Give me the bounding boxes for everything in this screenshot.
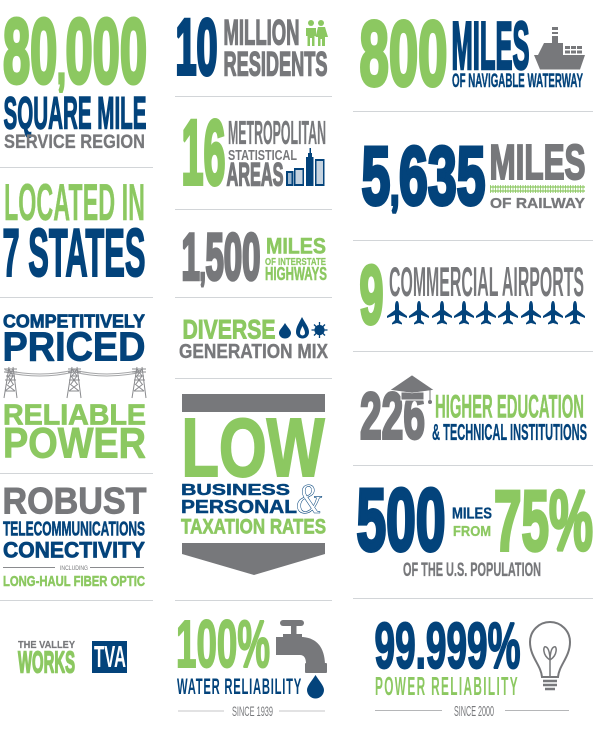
label: from: FROM <box>453 524 491 540</box>
icon: water drop large <box>296 317 309 338</box>
heading: power: POWER <box>3 420 146 468</box>
label: million: MILLION <box>224 14 300 52</box>
panel: 10 million residents: 10 <box>176 3 218 91</box>
panel: 226 higher education and technical institutions <box>360 375 587 452</box>
panel: 16 metropolitan statistical areas: 16 <box>182 102 226 204</box>
logo: the valley works <box>18 640 75 680</box>
label: miles: MILES <box>452 506 492 522</box>
heading: competitively: COMPETITIVELY <box>3 311 146 332</box>
panel: robust telecommunications connectivity <box>2 480 147 590</box>
heading: diverse: DIVERSE <box>182 315 276 345</box>
panel: 10 million residents <box>176 3 328 91</box>
big number: 9: 9 <box>360 249 384 341</box>
big number: 1,500: 1,500 <box>182 220 260 294</box>
big number: 5,635: 5,635 <box>362 130 486 222</box>
heading: conectivity: CONECTIVITY <box>3 538 145 563</box>
icon: railway track <box>490 187 585 191</box>
label: taxation rates: TAXATION RATES <box>181 515 326 539</box>
panel: low business and personal taxation rates <box>181 394 326 575</box>
label: since 1939: SINCE 1939 <box>232 703 273 719</box>
panel: 800 miles of navigable waterway <box>360 3 585 105</box>
icon: sun <box>312 322 328 338</box>
icon: transmission towers <box>4 367 146 398</box>
label: highways: HIGHWAYS <box>265 263 327 284</box>
arrow: down <box>182 543 325 575</box>
label: of railway: OF RAILWAY <box>490 196 585 212</box>
label: residents: RESIDENTS <box>224 46 328 84</box>
heading: robust: ROBUST <box>2 480 147 522</box>
icon: graduation cap <box>390 375 434 404</box>
panel: 100% water reliability <box>176 607 327 719</box>
label: long-haul fiber optic: LONG-HAUL FIBER OPTIC <box>3 573 145 590</box>
icon: water drop <box>307 675 324 698</box>
heading: low: LOW <box>182 402 325 494</box>
big number: 226: 226 <box>360 378 425 452</box>
label: service region: SERVICE REGION <box>4 132 145 153</box>
icon: cargo ship <box>534 27 585 70</box>
icon: nine planes <box>387 301 585 324</box>
text: 7 STATES <box>2 215 146 291</box>
panel: 5,635 miles of railway <box>362 130 586 222</box>
heading: priced: PRICED <box>2 324 146 370</box>
text: LOCATED IN <box>4 173 145 231</box>
icon: faucet <box>276 620 327 673</box>
panel: 80,000 square mile service region <box>3 0 147 153</box>
label: generation mix: GENERATION MIX <box>179 341 329 363</box>
icon: man and woman <box>306 20 328 46</box>
icon: light bulb <box>530 622 570 689</box>
label: water reliability: WATER RELIABILITY <box>177 674 302 699</box>
icon: water drop small <box>279 323 291 338</box>
heading: telecommunications: TELECOMMUNICATIONS <box>3 519 145 541</box>
panel: diverse generation mix <box>179 315 329 363</box>
label: areas: AREAS <box>226 156 284 192</box>
icon: city buildings <box>286 148 324 186</box>
label: of interstate: OF INTERSTATE <box>265 257 326 268</box>
ampersand: & <box>296 477 322 523</box>
text: METROPOLITAN <box>228 114 326 151</box>
label: miles: MILES <box>266 234 326 259</box>
label: business: BUSINESS <box>181 482 290 499</box>
panel: 1,500 miles of interstate highways <box>182 220 327 294</box>
label: the valley: THE VALLEY <box>18 640 75 651</box>
banner bar <box>182 394 325 412</box>
heading: reliable: RELIABLE <box>3 400 146 432</box>
logo: TVA <box>92 639 127 674</box>
big number: 500: 500 <box>356 470 446 569</box>
text: SQUARE MILE <box>4 88 146 138</box>
panel: 500 miles from 75% of the U.S. population <box>356 470 593 581</box>
label: statistical: STATISTICAL <box>228 148 297 164</box>
panel: 9 commercial airports <box>360 249 585 341</box>
label: personal: PERSONAL <box>181 497 297 517</box>
panel: competitively priced reliable power <box>2 311 146 468</box>
panel: 99.999% power reliability <box>374 609 570 720</box>
text: WORKS <box>18 644 75 680</box>
big number: 800: 800 <box>360 3 448 105</box>
logo: TVA: TVA <box>94 639 126 674</box>
label: including: INCLUDING <box>60 566 88 572</box>
panel: 99.999% power reliability: SINCE 2000 <box>454 703 494 720</box>
big number: 100%: 100% <box>176 607 270 682</box>
panel: located in 7 states <box>2 173 146 291</box>
big number: 80,000: 80,000 <box>3 0 147 102</box>
